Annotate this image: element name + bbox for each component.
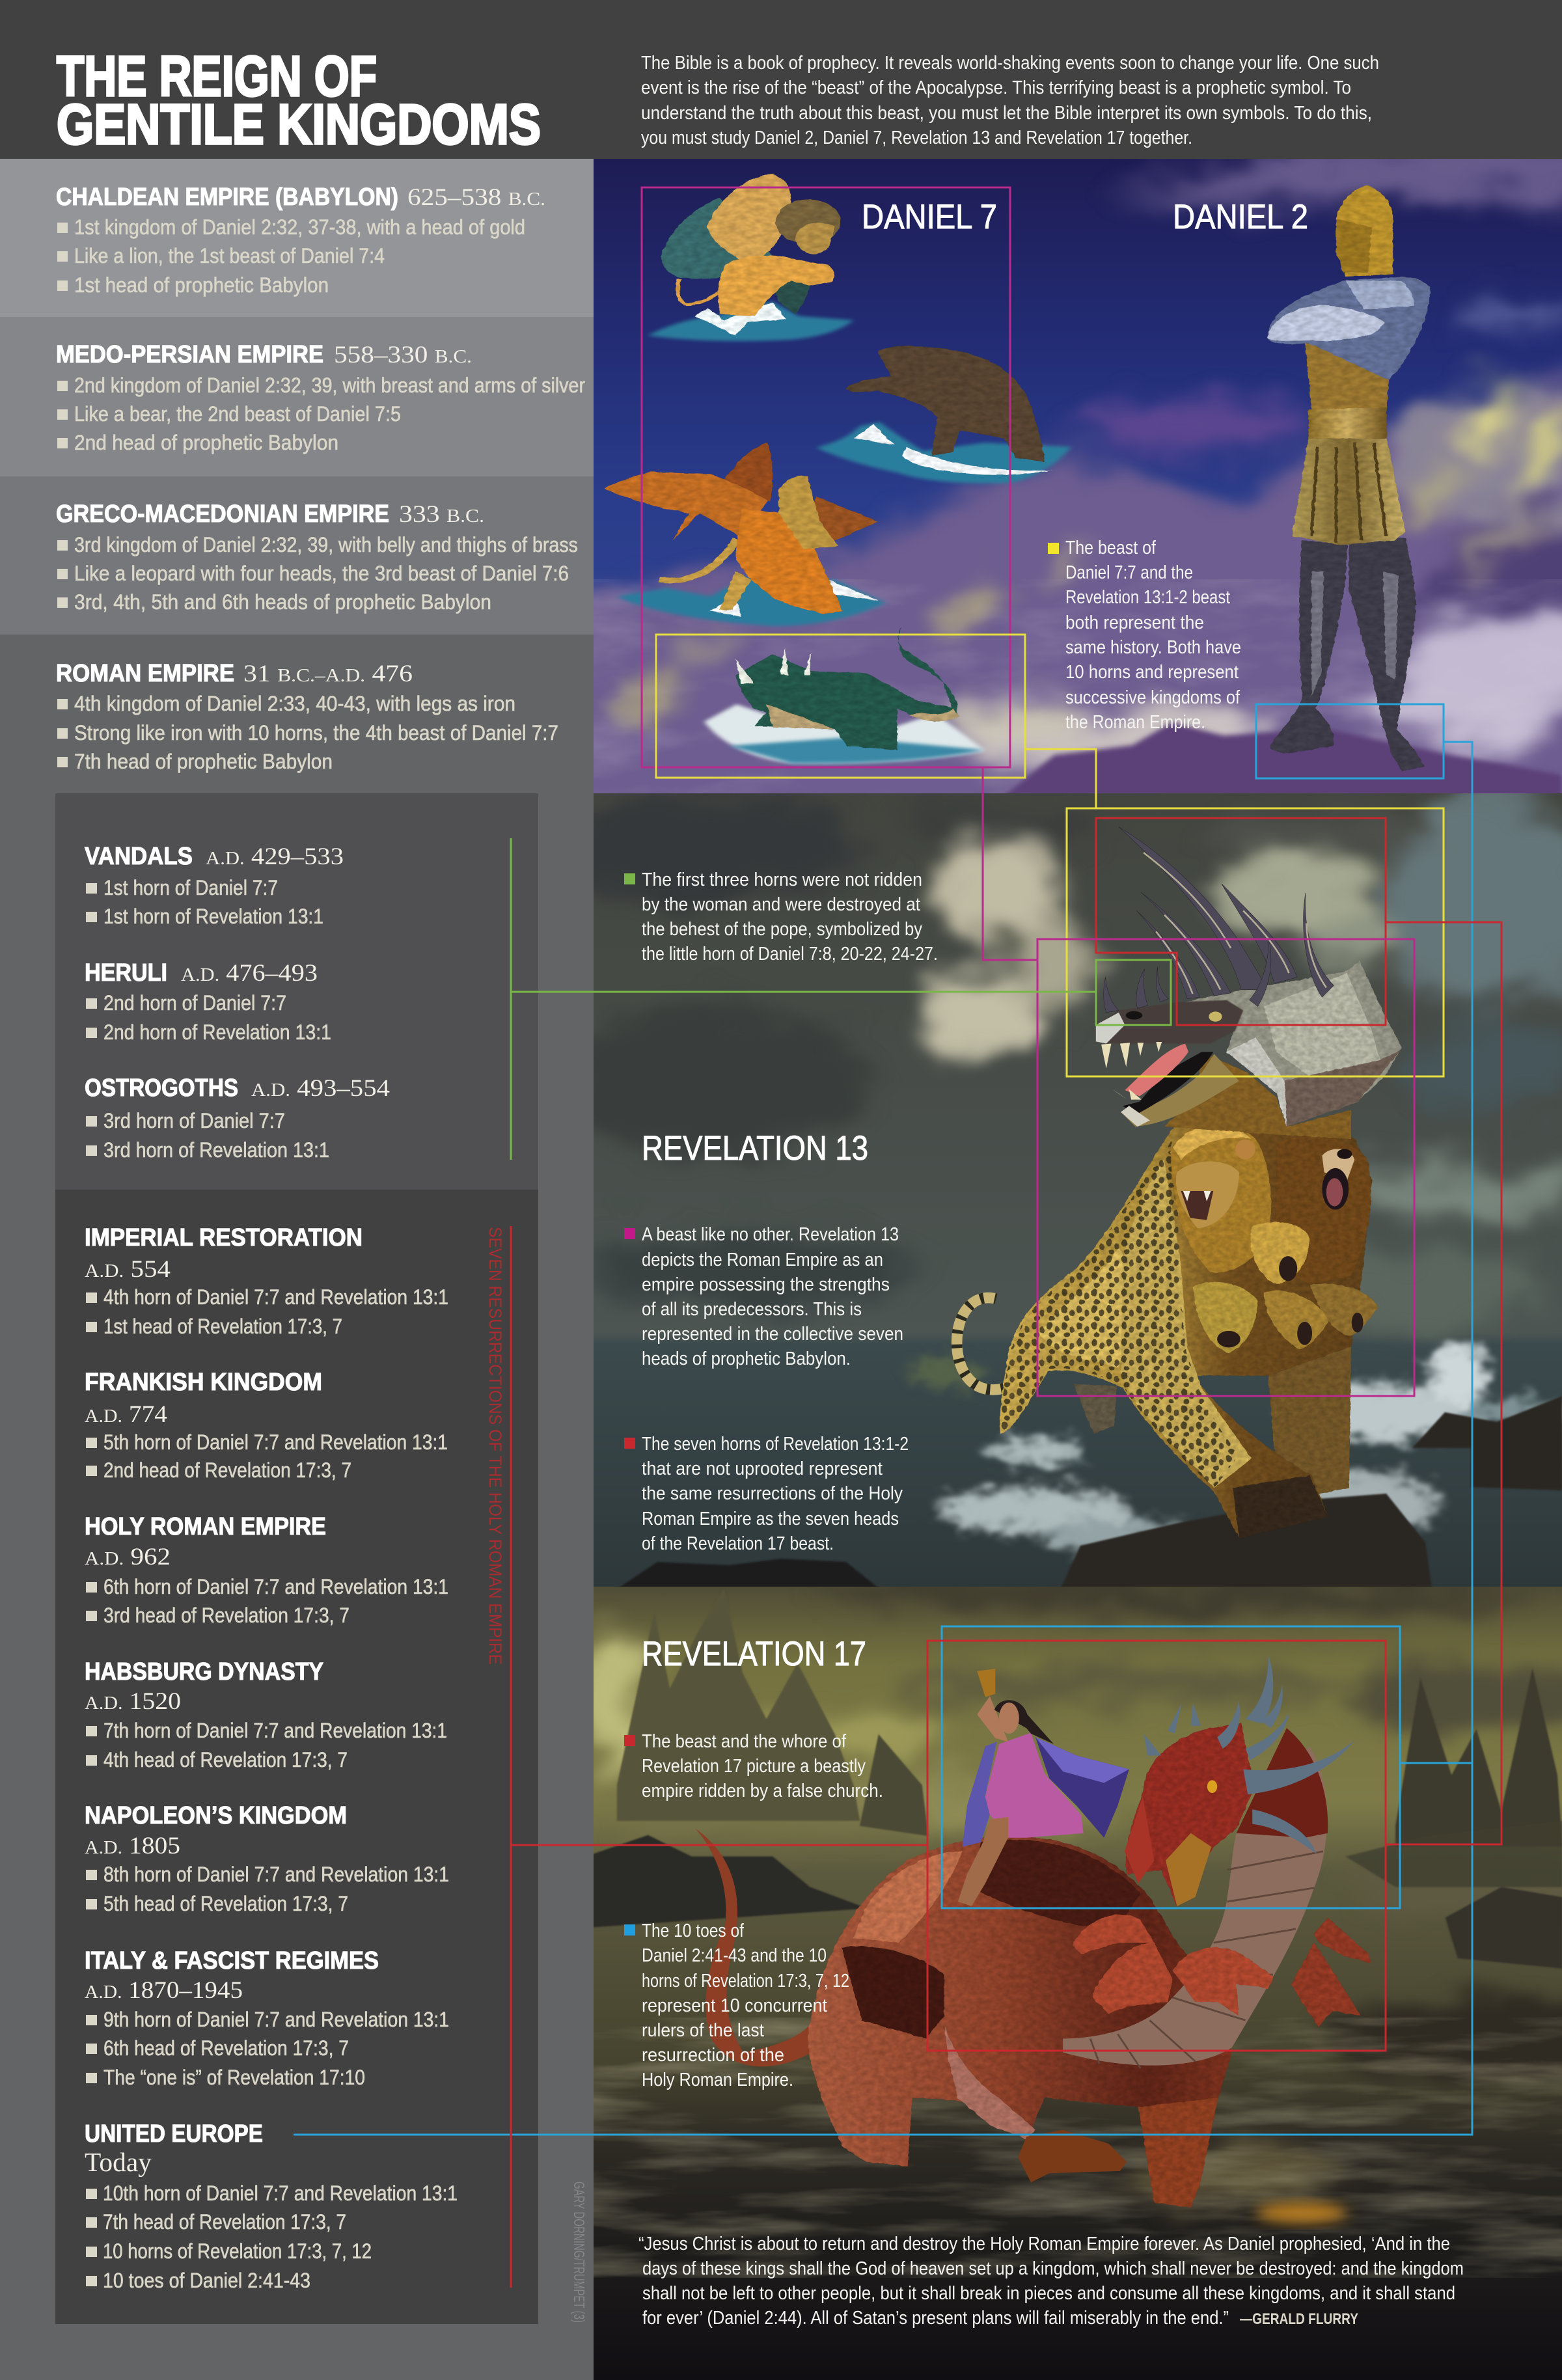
text block: Medo-Persian Empire xyxy=(56,341,585,454)
frame: Revelation 13 heads magenta xyxy=(1037,939,1414,1396)
text block: Greco-Macedonian Empire: Like a leopard with four heads, the 3rd beast of Daniel 7:6 xyxy=(74,562,569,585)
icon: spotted tail xyxy=(957,1298,1005,1389)
icon: leopard body xyxy=(1000,1123,1372,1539)
text block: Frankish Kingdom: FRANKISH KINGDOM xyxy=(85,1369,322,1396)
text block: United Europe: 10 horns of Revelation 17:3, 7, 12 xyxy=(103,2239,372,2263)
text block: Greco-Macedonian Empire: 333 B.C. xyxy=(399,501,484,528)
callout: yellow note: The beast of xyxy=(1065,538,1157,558)
callout: ten toes note: horns of Revelation 17:3, 7, 12 xyxy=(642,1971,849,1991)
callout: green note: by the woman and were destroyed at xyxy=(642,894,920,915)
text block: Habsburg Dynasty: 4th head of Revelation 17:3, 7 xyxy=(103,1748,348,1771)
quote by Gerald Flurry: days of these kings shall the God of heaven set up a kingdom, which shall never be destroyed: and the kingdom xyxy=(642,2258,1464,2279)
intro text block: event is the rise of the “beast” of the Apocalypse. This terrifying beast is a prophetic symbol. To xyxy=(641,77,1351,98)
callout: yellow note: both represent the xyxy=(1065,612,1204,633)
icon: dragon snout and teeth xyxy=(1096,1000,1243,1100)
callout: magenta note: depicts the Roman Empire as an xyxy=(642,1250,883,1270)
quote by Gerald Flurry: for ever’ (Daniel 2:44). All of Satan’s present plans will fail miserably in the end.” xyxy=(642,2308,1229,2329)
heading: Revelation 17: REVELATION 17 xyxy=(642,1635,866,1673)
icon: iron legs and feet xyxy=(1270,538,1424,772)
text block: United Europe: Today xyxy=(85,2147,152,2177)
text block: Holy Roman Empire xyxy=(85,1513,448,1627)
callout: yellow note: Daniel 7:7 and the xyxy=(1065,562,1193,583)
text block: Holy Roman Empire: 3rd head of Revelation 17:3, 7 xyxy=(103,1604,349,1627)
intro text block: understand the truth about this beast, you must let the Bible interpret its own symbols. To do this, xyxy=(641,103,1372,124)
callout: red note: Roman Empire as the seven heads xyxy=(642,1509,899,1529)
frame: Revelation 17 woman blue xyxy=(942,1626,1400,1908)
text block: Frankish Kingdom xyxy=(85,1369,448,1482)
text block: Habsburg Dynasty: HABSBURG DYNASTY xyxy=(85,1658,323,1686)
quote by Gerald Flurry: —GERALD FLURRY xyxy=(1240,2310,1358,2328)
text block: Habsburg Dynasty: 7th horn of Daniel 7:7 and Revelation 13:1 xyxy=(103,1719,447,1742)
callout: yellow note: Revelation 13:1-2 beast xyxy=(1065,587,1230,608)
icon: winged lion on waves xyxy=(648,174,854,341)
text block: Heruli: HERULI xyxy=(85,959,167,987)
connector lines and callout frames xyxy=(294,187,1501,2288)
icon: bronze skirt xyxy=(1292,439,1405,545)
callout: beast and whore note: The beast and the whore of xyxy=(642,1731,847,1752)
Daniel 7 beasts in zoom coordinates xyxy=(605,174,1071,763)
frame: seven horns red xyxy=(1096,818,1386,1025)
callout: magenta note: heads of prophetic Babylon. xyxy=(642,1348,851,1369)
text block: Italy and Fascist Regimes: 6th head of Revelation 17:3, 7 xyxy=(103,2036,349,2060)
text block: Napoleon's Kingdom: A.D. 1805 xyxy=(85,1833,180,1859)
callout: green note: the behest of the pope, symbolized by xyxy=(642,919,922,940)
callout: magenta note: A beast like no other. Revelation 13 xyxy=(642,1224,899,1245)
callout: magenta note: of all its predecessors. This is xyxy=(642,1299,862,1320)
connector: red resurrections xyxy=(511,1226,927,2288)
callout: magenta note xyxy=(624,1224,903,1369)
connector: red horns xyxy=(1386,922,1501,1844)
text block: United Europe: 10th horn of Daniel 7:7 and Revelation 13:1 xyxy=(103,2182,458,2205)
text block: Frankish Kingdom: A.D. 774 xyxy=(85,1401,167,1428)
text block: United Europe: UNITED EUROPE xyxy=(85,2120,263,2148)
text block: Chaldean Empire: Like a lion, the 1st beast of Daniel 7:4 xyxy=(74,244,385,267)
text block: Imperial Restoration: A.D. 554 xyxy=(85,1256,171,1283)
text block: Frankish Kingdom: 5th horn of Daniel 7:7 and Revelation 13:1 xyxy=(103,1430,448,1454)
callout: ten toes note xyxy=(624,1921,849,2090)
callout: ten toes note: represent 10 concurrent xyxy=(642,1995,827,2016)
callout: yellow note: the Roman Empire. xyxy=(1065,712,1205,733)
callout: red note: the same resurrections of the Holy xyxy=(642,1483,903,1504)
text block: Habsburg Dynasty: A.D. 1520 xyxy=(85,1688,181,1715)
text block: Vandals: A.D. 429–533 xyxy=(206,843,344,870)
text block: Italy and Fascist Regimes xyxy=(85,1947,449,2089)
text block: Italy and Fascist Regimes: 9th horn of Daniel 7:7 and Revelation 13:1 xyxy=(103,2008,449,2031)
text block: Roman Empire xyxy=(56,660,558,773)
text block: Napoleon's Kingdom: 8th horn of Daniel 7:7 and Revelation 13:1 xyxy=(103,1863,449,1886)
text block: Heruli: A.D. 476–493 xyxy=(181,960,318,987)
title xyxy=(57,45,541,156)
text block: Ostrogoths: OSTROGOTHS xyxy=(85,1074,238,1102)
text block: Medo-Persian Empire: Like a bear, the 2nd beast of Daniel 7:5 xyxy=(74,402,401,426)
callout: yellow note: 10 horns and represent xyxy=(1065,662,1239,683)
callout: yellow note: same history. Both have xyxy=(1065,637,1241,658)
callout: ten toes note: The 10 toes of xyxy=(642,1921,745,1941)
text block: Greco-Macedonian Empire: 3rd, 4th, 5th and 6th heads of prophetic Babylon xyxy=(74,590,491,614)
frame: three horns green xyxy=(1096,960,1171,1025)
text block: Roman Empire: 31 B.C.–A.D. 476 xyxy=(243,661,413,687)
panel: left column background xyxy=(0,159,594,2380)
icon: gold belt and torso xyxy=(1305,343,1390,439)
icon: leopard heads xyxy=(1194,1222,1378,1353)
icon: red beast body xyxy=(808,1836,1232,2208)
text block: Heruli: 2nd horn of Daniel 7:7 xyxy=(103,991,286,1015)
text block: Medo-Persian Empire: 2nd head of prophetic Babylon xyxy=(74,431,338,454)
text block: Roman Empire: 4th kingdom of Daniel 2:33, 40-43, with legs as iron xyxy=(74,692,515,715)
callout: beast and whore note: Revelation 17 picture a beastly xyxy=(642,1756,866,1777)
callout: yellow note: successive kingdoms of xyxy=(1065,687,1240,708)
callout: beast and whore note: empire ridden by a false church. xyxy=(642,1781,883,1801)
icon: bear head xyxy=(1268,1136,1371,1284)
text block: Heruli: 2nd horn of Revelation 13:1 xyxy=(103,1020,331,1044)
callout: red note xyxy=(624,1434,909,1554)
text block: Chaldean Empire: 625–538 B.C. xyxy=(407,184,545,211)
Statue of Daniel 2 xyxy=(1267,185,1431,772)
quote by Gerald Flurry xyxy=(638,2234,1464,2329)
text block: Chaldean Empire: 1st kingdom of Daniel 2:32, 37-38, with a head of gold xyxy=(74,215,525,239)
sea foam xyxy=(905,1343,1562,1553)
Beast in crop coordinates xyxy=(957,827,1402,1539)
intro text block: The Bible is a book of prophecy. It reveals world-shaking events soon to change your life. One such xyxy=(641,53,1379,74)
text block: Holy Roman Empire: 6th horn of Daniel 7:7 and Revelation 13:1 xyxy=(103,1575,448,1598)
text block: Holy Roman Empire: HOLY ROMAN EMPIRE xyxy=(85,1513,326,1540)
heading: Daniel 7: DANIEL 7 xyxy=(862,198,997,236)
text block: United Europe xyxy=(85,2120,458,2292)
icon: lion head xyxy=(1171,1123,1271,1273)
callout: red note: that are not uprooted represent xyxy=(642,1458,883,1479)
frame: fourth beast xyxy=(656,635,1025,778)
mountains xyxy=(586,1589,1562,1969)
text block: Italy and Fascist Regimes: The “one is” of Revelation 17:10 xyxy=(103,2066,365,2089)
text block: Greco-Macedonian Empire xyxy=(56,500,578,614)
text block: United Europe: 7th head of Revelation 17:3, 7 xyxy=(103,2210,346,2234)
icon: striped neck xyxy=(1063,1728,1328,2068)
text block: Vandals: VANDALS xyxy=(85,843,193,870)
quote by Gerald Flurry: “Jesus Christ is about to return and destroy the Holy Roman Empire forever. As Daniel prophesied, ‘And in the xyxy=(638,2234,1450,2254)
text block: Roman Empire: Strong like iron with 10 horns, the 4th beast of Daniel 7:7 xyxy=(74,721,558,745)
frame: Revelation 13 head yellow xyxy=(1067,808,1444,1076)
glow on the ground xyxy=(1256,2202,1347,2223)
intro text block: you must study Daniel 2, Daniel 7, Revelation 13 and Revelation 17 together. xyxy=(641,128,1192,148)
text block: Napoleon's Kingdom: 5th head of Revelation 17:3, 7 xyxy=(103,1892,348,1915)
vertical label: seven resurrections: SEVEN RESURRECTIONS OF THE HOLY ROMAN EMPIRE xyxy=(486,1227,505,1665)
connector: magenta xyxy=(983,767,1037,960)
connector: blue xyxy=(294,742,1472,2135)
icon: four-headed winged leopard xyxy=(605,443,886,626)
panel: Revelation 17 illustration xyxy=(586,1578,1562,2380)
icon: dragon head with horns xyxy=(1125,1655,1355,1906)
callout: red note: The seven horns of Revelation 13:1-2 xyxy=(642,1434,909,1455)
heading: Daniel 2: DANIEL 2 xyxy=(1173,198,1308,236)
quote by Gerald Flurry: shall not be left to other people, but it shall break in pieces and consume all these kingdoms, and it shall stand xyxy=(642,2283,1455,2304)
callout: ten toes note: Holy Roman Empire. xyxy=(642,2070,793,2090)
text block: Chaldean Empire: CHALDEAN EMPIRE (BABYLON) xyxy=(56,184,398,211)
connector: green horns xyxy=(511,838,1096,1160)
icon: horns xyxy=(1104,827,1334,1013)
connector: yellow xyxy=(1025,749,1096,808)
callout: red note: of the Revelation 17 beast. xyxy=(642,1533,834,1554)
text block: Habsburg Dynasty xyxy=(85,1658,447,1771)
icon: beast tail xyxy=(695,1829,812,2066)
text block: Imperial Restoration: 4th horn of Daniel 7:7 and Revelation 13:1 xyxy=(103,1285,448,1309)
icon: golden head and helmet xyxy=(1336,185,1393,277)
callout: magenta note: empire possessing the strengths xyxy=(642,1274,890,1295)
text block: Heruli xyxy=(85,959,331,1044)
icon: green dragon beast xyxy=(704,627,985,763)
icon: neck and lower jaw xyxy=(1121,1044,1351,1139)
text block: Ostrogoths: 3rd horn of Revelation 13:1 xyxy=(103,1138,329,1162)
text block: Roman Empire: 7th head of prophetic Babylon xyxy=(74,750,333,773)
text block: Vandals xyxy=(85,843,344,928)
callout: beast and whore note xyxy=(624,1731,883,1801)
text block: Greco-Macedonian Empire: GRECO-MACEDONIAN EMPIRE xyxy=(56,500,389,528)
frame: statue feet xyxy=(1256,704,1444,778)
callout: ten toes note: rulers of the last xyxy=(642,2020,764,2041)
text block: Medo-Persian Empire: 558–330 B.C. xyxy=(334,342,472,368)
icon: iron head plate xyxy=(1185,961,1402,1127)
text block: Italy and Fascist Regimes: ITALY & FASCIST REGIMES xyxy=(85,1947,379,1975)
icon: woman riding the beast xyxy=(958,1669,1129,1906)
panel: Revelation 13 illustration xyxy=(560,787,1562,1588)
frame: Revelation 17 beast red xyxy=(927,1641,1386,2051)
callout: ten toes note: Daniel 2:41-43 and the 10 xyxy=(642,1945,827,1966)
header band background xyxy=(0,0,1562,159)
icon: silver chest and arms xyxy=(1267,277,1431,381)
text block: Napoleon's Kingdom xyxy=(85,1802,449,1915)
panel: Daniel illustration xyxy=(594,159,1562,793)
callout: green note xyxy=(624,869,938,964)
text block: Chaldean Empire: 1st head of prophetic Babylon xyxy=(74,273,329,297)
text block: Ostrogoths: A.D. 493–554 xyxy=(251,1075,390,1102)
text block: Vandals: 1st horn of Daniel 7:7 xyxy=(103,876,278,899)
text block: United Europe: 10 toes of Daniel 2:41-43 xyxy=(103,2269,310,2292)
rocks xyxy=(618,1396,1562,1588)
callout: green note: the little horn of Daniel 7:8, 20-22, 24-27. xyxy=(642,944,938,964)
text block: Ostrogoths xyxy=(85,1074,390,1162)
callout: yellow note xyxy=(1048,538,1241,733)
text block: Italy and Fascist Regimes: A.D. 1870–1945 xyxy=(85,1977,243,2004)
text block: Medo-Persian Empire: 2nd kingdom of Daniel 2:32, 39, with breast and arms of silver xyxy=(74,374,585,397)
text block: Ostrogoths: 3rd horn of Daniel 7:7 xyxy=(103,1109,285,1132)
icon: bear on waves xyxy=(816,346,1071,484)
callout: ten toes note: resurrection of the xyxy=(642,2045,784,2066)
text block: Frankish Kingdom: 2nd head of Revelation 17:3, 7 xyxy=(103,1458,351,1482)
title: GENTILE KINGDOMS xyxy=(57,93,541,156)
callout: green note: The first three horns were not ridden xyxy=(642,869,922,890)
text block: Vandals: 1st horn of Revelation 13:1 xyxy=(103,905,323,928)
text block: Chaldean Empire xyxy=(56,184,545,297)
text block: Medo-Persian Empire: MEDO-PERSIAN EMPIRE xyxy=(56,341,323,368)
intro text block xyxy=(641,53,1379,148)
text block: Imperial Restoration: 1st head of Revelation 17:3, 7 xyxy=(103,1315,342,1338)
text block: Napoleon's Kingdom: NAPOLEON’S KINGDOM xyxy=(85,1802,347,1829)
text block: Imperial Restoration xyxy=(85,1224,448,1338)
rock base xyxy=(1002,722,1562,797)
text block: Roman Empire: ROMAN EMPIRE xyxy=(56,660,234,687)
title: THE REIGN OF xyxy=(57,45,377,108)
text block: Greco-Macedonian Empire: 3rd kingdom of Daniel 2:32, 39, with belly and thighs of brass xyxy=(74,533,578,556)
text block: Holy Roman Empire: A.D. 962 xyxy=(85,1544,171,1570)
icon: beast claws xyxy=(1018,2130,1127,2182)
Beast in crop coordinates xyxy=(695,1655,1371,2208)
heading: Revelation 13: REVELATION 13 xyxy=(642,1129,868,1168)
icon: red heads xyxy=(1072,1915,1371,2027)
callout: magenta note: represented in the collective seven xyxy=(642,1324,903,1345)
text block: Imperial Restoration: IMPERIAL RESTORATION xyxy=(85,1224,363,1252)
frame: Daniel 7 beasts xyxy=(642,187,1010,767)
